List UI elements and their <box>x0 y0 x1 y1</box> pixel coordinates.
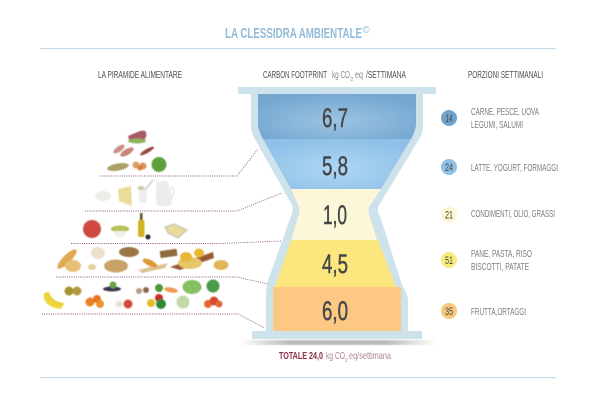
food tier: meat, fish, eggs <box>107 131 166 172</box>
total: kg CO <box>326 350 345 362</box>
title: LA CLESSIDRA AMBIENTALE <box>225 25 362 42</box>
legend: carne, pesce, uova: CARNE, PESCE, UOVA <box>471 106 539 118</box>
band 1,0: 1,0 <box>323 200 347 230</box>
food tier: condiments <box>83 213 187 240</box>
band 1,0 <box>291 189 381 240</box>
food tier: bread, pasta, rice, potatoes <box>55 247 228 273</box>
band 6,7: 6,7 <box>322 103 348 133</box>
band 4,5 <box>275 240 396 287</box>
band 6,0: 6,0 <box>322 296 348 326</box>
band 4,5: 4,5 <box>322 249 348 279</box>
heading: carbon footprint: kg CO <box>332 70 350 81</box>
hourglass glass frame <box>251 92 423 334</box>
legend: latte, yogurt, formaggi: 24 <box>445 162 453 174</box>
total <box>279 350 391 364</box>
total: eq/settimana <box>349 350 391 362</box>
band 5,8: 5,8 <box>322 151 348 181</box>
legend: carne, pesce, uova: 14 <box>446 113 452 125</box>
band 6,7 <box>258 94 416 139</box>
food tier: fruit and vegetables <box>44 280 222 309</box>
heading: carbon footprint: CARBON FOOTPRINT <box>263 70 327 81</box>
legend: frutta, ortaggi: FRUTTA,ORTAGGI <box>471 306 526 318</box>
legend: pane, pasta, riso: BISCOTTI, PATATE <box>471 261 529 273</box>
band 6,0 <box>273 287 401 331</box>
legend: carne, pesce, uova <box>441 106 539 131</box>
heading: la piramide alimentare: LA PIRAMIDE ALIMENTARE <box>98 70 182 81</box>
legend: frutta, ortaggi <box>441 303 526 319</box>
heading: carbon footprint: 2 <box>350 77 354 83</box>
hourglass <box>238 87 436 345</box>
legend: condimenti, olio, grassi: 21 <box>445 210 453 222</box>
legend: pane, pasta, riso: 51 <box>445 255 453 267</box>
legend: frutta, ortaggi: 35 <box>445 306 453 318</box>
heading: carbon footprint: /SETTIMANA <box>366 70 406 81</box>
hourglass top bar <box>238 87 436 94</box>
heading: carbon footprint <box>263 70 406 83</box>
legend: latte, yogurt, formaggi <box>441 159 558 175</box>
heading: porzioni settimanali: PORZIONI SETTIMANALI <box>468 70 543 81</box>
title: © <box>362 25 370 36</box>
total: TOTALE 24,0 <box>279 350 323 362</box>
legend: pane, pasta, riso <box>441 248 532 273</box>
food tier: dairy <box>95 180 174 207</box>
hourglass base bar <box>252 331 422 339</box>
legend: carne, pesce, uova: LEGUMI, SALUMI <box>471 119 523 131</box>
total: 2 <box>345 358 348 364</box>
base shadow <box>240 340 436 345</box>
legend: pane, pasta, riso: PANE, PASTA, RISO <box>471 248 532 260</box>
title <box>225 25 370 42</box>
legend: condimenti, olio, grassi <box>441 206 555 222</box>
heading: carbon footprint: eq <box>355 70 363 81</box>
band 5,8 <box>263 139 411 189</box>
connector lines <box>42 149 282 328</box>
